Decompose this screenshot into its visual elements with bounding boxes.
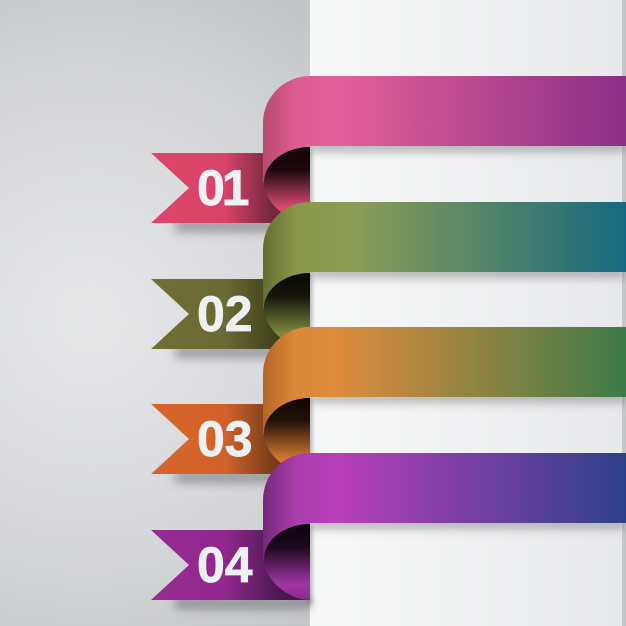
page edge shadow 01 (306, 146, 312, 224)
page edge shadow 03 (306, 397, 312, 475)
flag 03 (151, 404, 310, 474)
ribbon 04 (151, 453, 626, 609)
page edge shadow 04 (306, 523, 312, 605)
band 04 (310, 453, 626, 523)
flag 02 (151, 279, 310, 349)
fold 03 (263, 327, 310, 433)
flag 01 (151, 153, 310, 223)
band 01 (310, 76, 626, 146)
number 03: 03 (197, 411, 253, 467)
number 04: 04 (197, 537, 253, 593)
shadow 03 (175, 393, 626, 483)
ribbon 01 (151, 76, 626, 232)
ribbon 02 (151, 202, 626, 358)
band 02 (310, 202, 626, 272)
number 01: 01 (197, 160, 249, 216)
curl interior 01 (264, 147, 310, 223)
band 03 (310, 327, 626, 397)
fold 02 (263, 202, 310, 308)
fold 01 (263, 76, 310, 182)
shadow 01 (175, 142, 626, 232)
curl interior 02 (264, 273, 310, 349)
shadow 04 (175, 519, 626, 609)
white page (310, 0, 622, 626)
page edge shadow 02 (306, 272, 312, 350)
fold 04 (263, 453, 310, 559)
curl interior 03 (264, 398, 310, 474)
ribbon 03 (151, 327, 626, 483)
shadow 02 (175, 268, 626, 358)
flag 04 (151, 530, 310, 600)
number 02: 02 (197, 286, 253, 342)
curl interior 04 (264, 524, 310, 600)
